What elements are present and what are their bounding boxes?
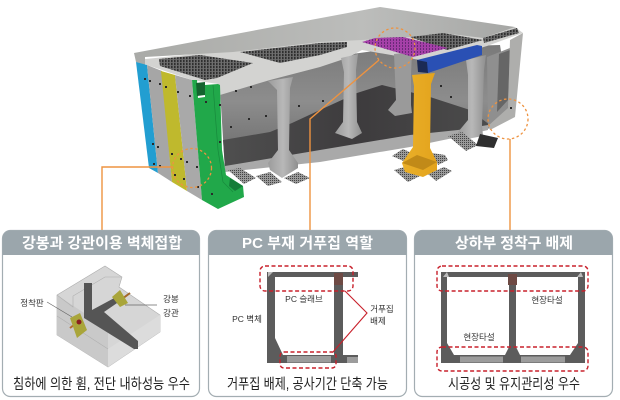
steel T member bbox=[84, 283, 138, 349]
red dashed box: lower bbox=[437, 347, 588, 371]
left face strip gray 2 bbox=[175, 75, 202, 200]
section drawing bbox=[267, 272, 358, 363]
red dashed box: lower joint bbox=[280, 352, 336, 368]
red dashed box: upper bbox=[437, 266, 588, 291]
right end frame bbox=[488, 33, 523, 130]
left face strip blue bbox=[136, 62, 158, 173]
roof slab bbox=[134, 7, 515, 65]
joint illustration bbox=[57, 266, 160, 367]
callout circle: anchor removal bbox=[488, 99, 528, 139]
mesh under column 4 bbox=[448, 132, 498, 151]
label 현장타설 upper: 현장타설 bbox=[531, 295, 563, 305]
rebar field left bbox=[159, 55, 253, 80]
steel bar left bbox=[70, 322, 78, 328]
rebar field right bbox=[410, 33, 483, 50]
purple precast slab bbox=[362, 37, 448, 57]
panel 2 box bbox=[208, 230, 406, 396]
label 거푸집: 거푸집 bbox=[370, 304, 394, 314]
panel 3 header band bbox=[414, 230, 612, 255]
label 강관: 강관 bbox=[163, 308, 179, 318]
green wall segment bbox=[192, 80, 244, 209]
leader line: wall joint bbox=[102, 167, 173, 232]
panel 3 heading: 상하부 정착구 배제 bbox=[455, 235, 573, 252]
red pointer lines bbox=[333, 291, 367, 352]
3D structure cutaway bbox=[134, 7, 523, 209]
column 3 bbox=[388, 52, 412, 116]
label leader 강봉 강관 bbox=[125, 304, 157, 306]
panel: anchor removal bbox=[414, 230, 612, 396]
interior floor bbox=[223, 85, 490, 168]
interior back wall bbox=[220, 45, 510, 170]
steel plate right bbox=[112, 290, 128, 307]
panel 2 caption: 거푸집 배제, 공사기간 단축 가능 bbox=[227, 376, 388, 393]
blue precast beam bbox=[417, 45, 482, 73]
mesh under gold column bbox=[392, 149, 452, 182]
panel 1 header band bbox=[2, 230, 200, 255]
panel 3 box bbox=[414, 230, 612, 396]
panel 1 box bbox=[2, 230, 200, 396]
label 현장타설 lower: 현장타설 bbox=[463, 332, 495, 342]
wall bolts bbox=[144, 78, 512, 195]
callout circle: PC member bbox=[375, 28, 415, 68]
label 강봉: 강봉 bbox=[163, 294, 179, 304]
label 배제: 배제 bbox=[370, 316, 386, 326]
column 2 bbox=[335, 54, 362, 139]
rebar field centre bbox=[240, 42, 347, 63]
mesh under column 1 bbox=[228, 168, 310, 186]
panel 2 header band bbox=[208, 230, 406, 255]
leader line: anchor removal bbox=[509, 139, 511, 232]
panel 3 caption: 시공성 및 유지관리성 우수 bbox=[448, 376, 580, 393]
label PC 슬래브: PC 슬래브 bbox=[285, 294, 323, 304]
steel plate left bbox=[70, 313, 87, 338]
panel: PC member bbox=[208, 230, 406, 396]
panel: wall joint bbox=[2, 230, 200, 396]
right end cell bbox=[487, 48, 510, 128]
rebar field right edge bbox=[483, 28, 519, 43]
red dashed box: upper joint bbox=[260, 266, 353, 291]
gold precast column bbox=[402, 73, 437, 177]
column 1 bbox=[268, 77, 298, 178]
leader line: PC member bbox=[310, 60, 379, 232]
roof underside light band bbox=[136, 27, 523, 95]
panel 1 caption: 침하에 의한 휨, 전단 내하성능 우수 bbox=[13, 376, 190, 393]
bar end bbox=[76, 320, 82, 324]
left face strip yellow bbox=[161, 71, 187, 191]
bottom slab front edge bbox=[225, 125, 488, 172]
label PC 벽체: PC 벽체 bbox=[232, 314, 262, 324]
left face strip gray 1 bbox=[147, 65, 172, 182]
label 정착판: 정착판 bbox=[20, 298, 44, 308]
callout circle: wall joint bbox=[172, 148, 212, 188]
label leader 정착판 bbox=[47, 302, 72, 317]
panel 1 heading: 강봉과 강관이용 벽체접합 bbox=[22, 235, 182, 252]
column 4 bbox=[458, 55, 486, 140]
section drawing bbox=[441, 272, 585, 363]
panel 2 heading: PC 부재 거푸집 역할 bbox=[242, 235, 373, 252]
steel bar right bbox=[122, 293, 130, 299]
